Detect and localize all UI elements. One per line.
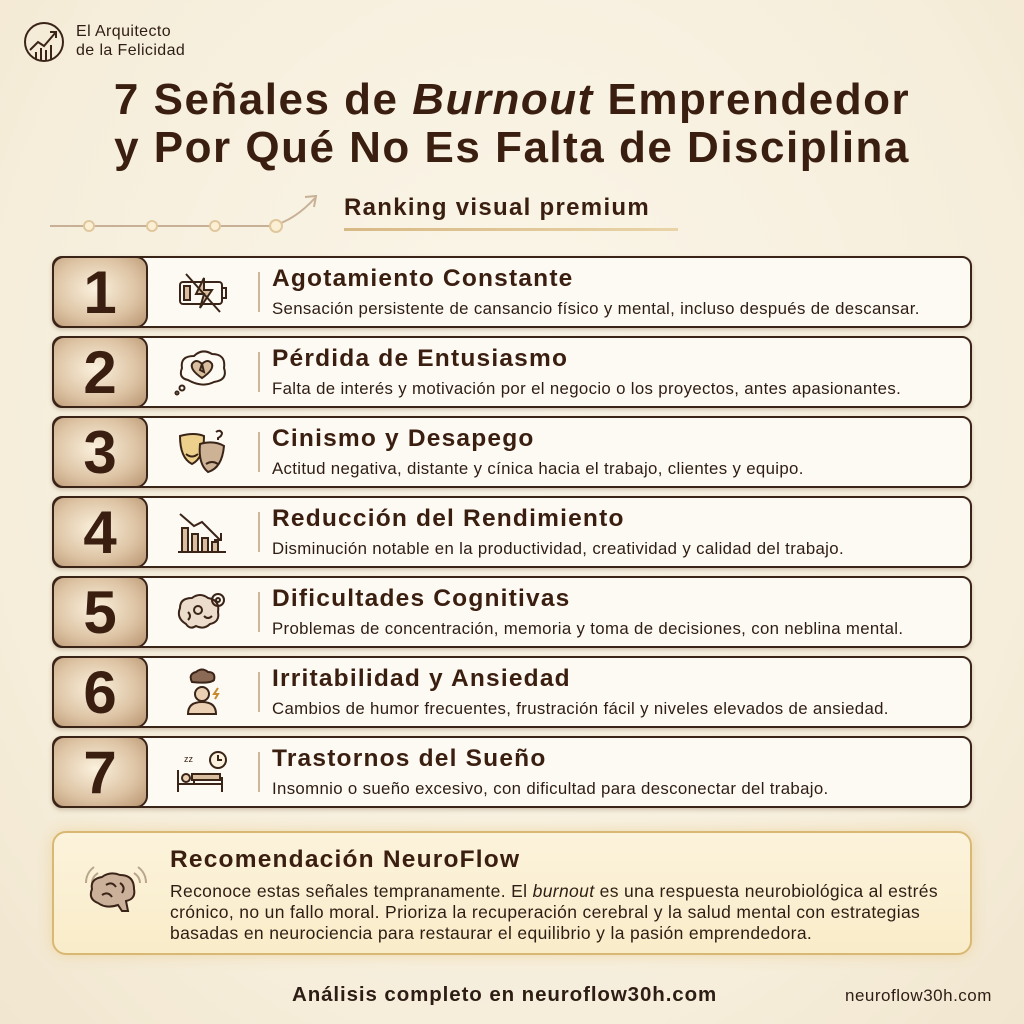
- logo: de la Felicidad: [76, 42, 185, 59]
- icon: brain: [85, 866, 147, 912]
- progress line decoration: [50, 194, 318, 233]
- row 5: Dificultades Cognitivas: [272, 585, 571, 612]
- row 3: 3: [83, 419, 117, 486]
- callout text: Reconoce estas señales tempranamente. El burnout es una respuesta neurobiológica al estrés: [170, 881, 938, 901]
- row 6: 6: [83, 659, 117, 726]
- row 2: Pérdida de Entusiasmo: [272, 345, 568, 372]
- row 5: [52, 576, 972, 648]
- logo: El Arquitecto: [76, 23, 171, 40]
- row 4: [52, 496, 972, 568]
- row 6: Irritabilidad y Ansiedad: [272, 665, 571, 692]
- icon: brain gears: [178, 593, 225, 629]
- title: y Por Qué No Es Falta de Disciplina: [114, 123, 910, 172]
- row 1: 1: [83, 259, 117, 326]
- title: [114, 75, 910, 172]
- row 4: Reducción del Rendimiento: [272, 505, 625, 532]
- row 4: 4: [83, 499, 117, 566]
- callout text: crónico, no un fallo moral. Prioriza la recuperación cerebral y la salud mental con estrategias: [170, 902, 920, 922]
- row 1: Agotamiento Constante: [272, 265, 574, 292]
- callout text: [170, 881, 938, 943]
- row 3: [52, 416, 972, 488]
- callout heading: Recomendación NeuroFlow: [170, 846, 520, 873]
- icon: bed and clock: [177, 751, 227, 792]
- footer url: neuroflow30h.com: [845, 986, 992, 1005]
- row 7: 7: [83, 739, 117, 806]
- row 2: 2: [83, 339, 117, 406]
- logo: [24, 22, 185, 62]
- row 2: Falta de interés y motivación por el negocio o los proyectos, antes apasionantes.: [272, 379, 901, 398]
- icon: broken heart cloud: [174, 350, 226, 396]
- subtitle: [344, 194, 678, 231]
- row 3: Cinismo y Desapego: [272, 425, 535, 452]
- icon: declining chart: [178, 513, 226, 553]
- row 4: Disminución notable en la productividad, creatividad y calidad del trabajo.: [272, 539, 844, 558]
- row 7: Trastornos del Sueño: [272, 745, 546, 772]
- row 6: Cambios de humor frecuentes, frustración fácil y niveles elevados de ansiedad.: [272, 699, 889, 718]
- row 5: 5: [83, 579, 117, 646]
- icon: bed and clock: zz: [184, 754, 194, 764]
- icon: battery: [179, 273, 227, 313]
- row 5: Problemas de concentración, memoria y toma de decisiones, con neblina mental.: [272, 619, 903, 638]
- row 3: Actitud negativa, distante y cínica hacia el trabajo, clientes y equipo.: [272, 459, 804, 478]
- row 2: [52, 336, 972, 408]
- callout text: basadas en neurociencia para restaurar el equilibrio y la pasión emprendedora.: [170, 923, 812, 943]
- subtitle: Ranking visual premium: [344, 194, 650, 221]
- row 1: [52, 256, 972, 328]
- row 7: Insomnio o sueño excesivo, con dificultad para desconectar del trabajo.: [272, 779, 829, 798]
- row 7: [52, 736, 972, 808]
- row 6: [52, 656, 972, 728]
- row 1: Sensación persistente de cansancio físico y mental, incluso después de descansar.: [272, 299, 920, 318]
- title: 7 Señales de Burnout Emprendedor: [114, 75, 910, 124]
- callout: recommendation: [52, 831, 972, 955]
- icon: masks: [179, 430, 226, 474]
- footer cta: Análisis completo en neuroflow30h.com: [292, 983, 717, 1006]
- icon: person with cloud: [187, 668, 220, 715]
